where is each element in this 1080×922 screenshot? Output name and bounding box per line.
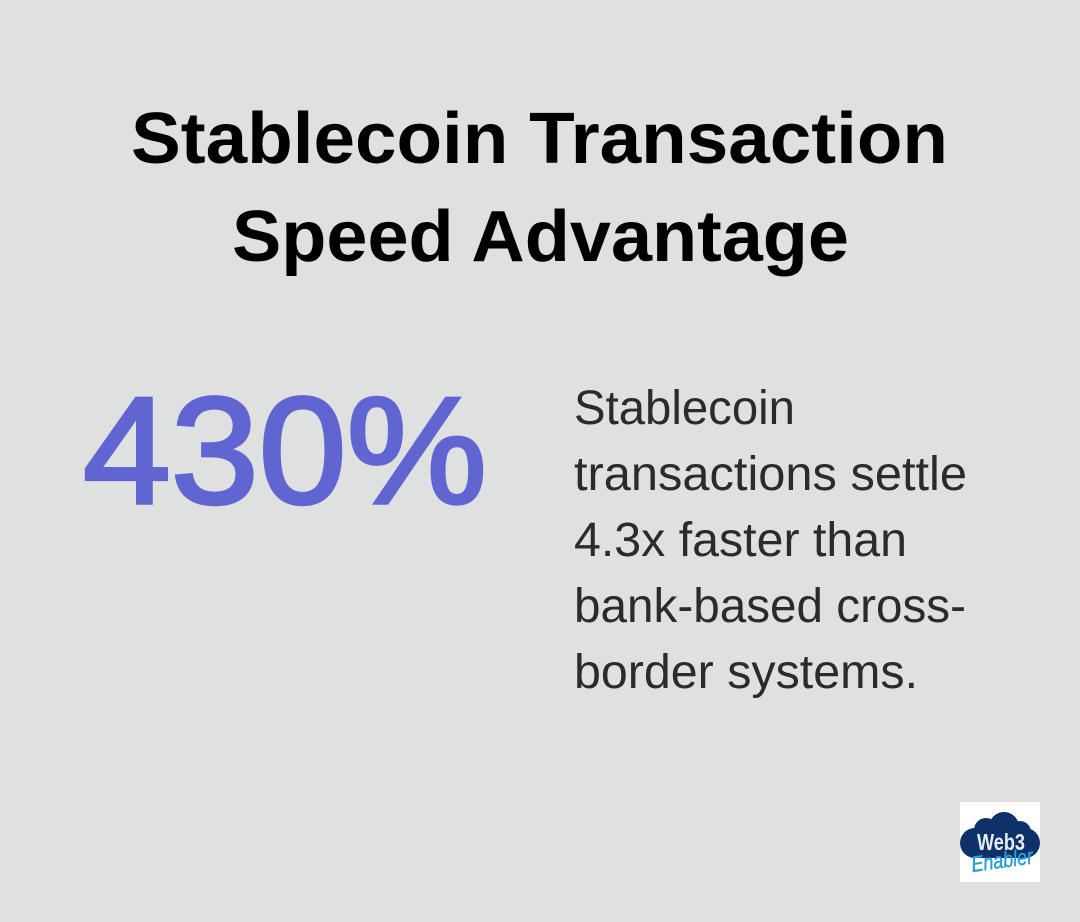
logo wordmark: Web3 <box>977 829 1025 855</box>
logo: Web3 Enabler <box>960 802 1040 882</box>
description text: border systems. <box>574 646 918 699</box>
description text: bank-based cross- <box>574 580 966 633</box>
description text <box>574 382 967 699</box>
logo script: Enabler <box>970 843 1036 877</box>
big statistic: 430%: 430% <box>83 366 487 536</box>
icon: cloud <box>960 812 1040 858</box>
title: Stablecoin Transaction <box>131 99 948 179</box>
description text: transactions settle <box>574 448 967 501</box>
title <box>131 99 948 277</box>
title: Speed Advantage <box>232 197 849 277</box>
description text: 4.3x faster than <box>574 514 907 567</box>
description text: Stablecoin <box>574 382 795 435</box>
